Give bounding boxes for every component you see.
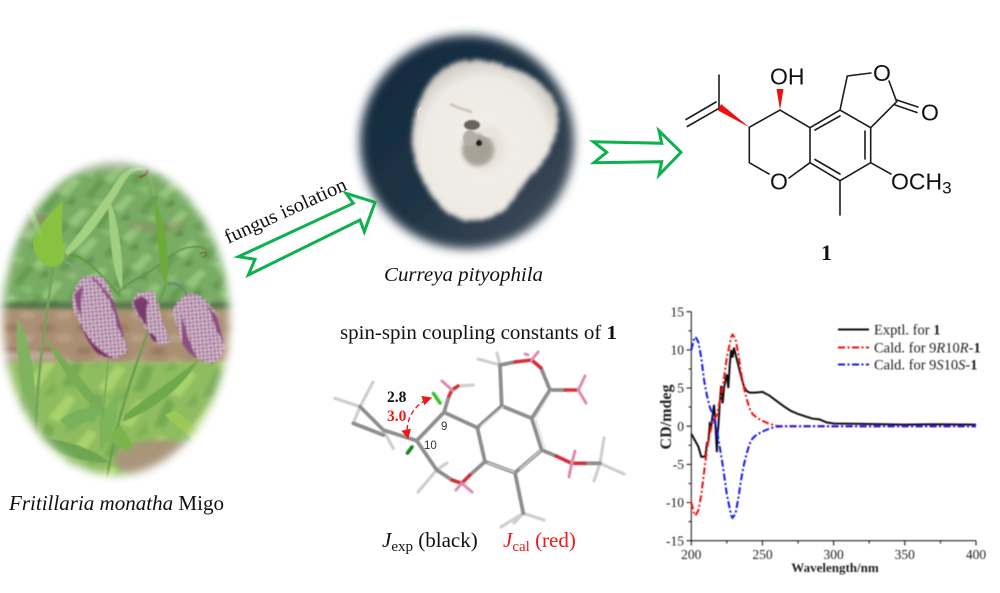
curve: calculated 9R10R [691, 335, 976, 515]
legend: Exptl. for 1 [874, 322, 940, 338]
y axis tick labels: 5 [677, 380, 684, 396]
legend: Cald. for 9S10S-1 [874, 358, 978, 374]
arrow: fungus to compound [593, 131, 681, 175]
colony centre [418, 104, 499, 166]
y axis tick labels: -5 [673, 457, 684, 472]
x axis tick labels: 250 [752, 547, 773, 562]
y axis tick labels: 0 [677, 419, 684, 434]
atom labels: OH [770, 64, 804, 90]
green coupled hydrogens [408, 394, 440, 453]
compound number: 1 [821, 240, 832, 265]
y axis tick labels: 10 [670, 342, 684, 358]
caption: fungus species name: Curreya pityophila [384, 264, 543, 286]
structure bonds [686, 73, 918, 215]
dark petri dish [360, 35, 574, 249]
flower 3 [173, 294, 225, 364]
label: J cal red: cal [512, 539, 530, 555]
plant: stems and leaves [36, 170, 207, 477]
CD spectrum chart [658, 304, 986, 575]
x axis title: Wavelength/nm [791, 560, 879, 575]
stereo wedge: red bonds [718, 89, 784, 127]
oxygen lone pairs [442, 352, 586, 492]
arrow label: fungus isolation: fungus isolation [221, 174, 350, 249]
y axis tick labels: -10 [666, 495, 684, 510]
atom labels: OCH [891, 168, 942, 194]
atom label 10: 10 [424, 440, 437, 452]
value: calculated 3.0: 3.0 [387, 408, 407, 425]
double bond highlights [481, 392, 551, 472]
white mycelium colony [412, 60, 558, 221]
x axis tick labels: 300 [823, 547, 844, 562]
y axis title: CD/mdeg [658, 385, 675, 449]
atom labels: O [873, 60, 891, 86]
curve: experimental [691, 348, 976, 457]
atom labels [770, 60, 952, 198]
y axis tick labels: 15 [670, 304, 684, 320]
atom label 9: 9 [441, 421, 447, 433]
photo background: green beds and soil [0, 156, 236, 482]
3D molecular model [335, 352, 624, 527]
label: J cal red: (red) [530, 528, 576, 552]
label: J exp black: J [382, 528, 393, 552]
arrow: plant to fungus [238, 193, 375, 275]
oxygens [449, 360, 585, 483]
x axis tick labels: 350 [895, 547, 915, 562]
flower 1 [72, 276, 128, 358]
hydrogens [335, 353, 624, 527]
x axis tick labels: 400 [966, 547, 986, 562]
label: J exp black: (black) [413, 528, 478, 552]
caption: plant species name: Fritillaria monatha Migo [8, 491, 224, 515]
carbon skeleton [353, 362, 600, 513]
y axis tick labels: -15 [666, 534, 684, 548]
label: J exp black: exp [391, 539, 413, 555]
curve: calculated 9S10S [691, 337, 976, 518]
label: J cal red: J [503, 528, 514, 552]
x axis tick labels: 200 [681, 547, 702, 562]
photo: Fritillaria monatha plant in a soft oval [0, 156, 236, 482]
legend: Cald. for 9R10R-1 [874, 340, 981, 356]
coupling annotation: arrow [407, 398, 431, 438]
atom labels: O [770, 168, 788, 194]
legend [838, 322, 981, 374]
value: experimental 2.8: 2.8 [387, 389, 407, 406]
flower 2 [132, 291, 170, 344]
heading: spin-spin coupling: spin-spin coupling constants of 1 [340, 322, 617, 344]
photo: fungus colony in a dish [360, 35, 574, 249]
y axis tick labels [666, 304, 684, 548]
structure: compound 1 [686, 60, 952, 215]
x axis tick labels [681, 547, 986, 562]
atom labels: O [921, 100, 939, 126]
axes and ticks [686, 312, 976, 546]
atom labels: 3 [942, 178, 952, 198]
